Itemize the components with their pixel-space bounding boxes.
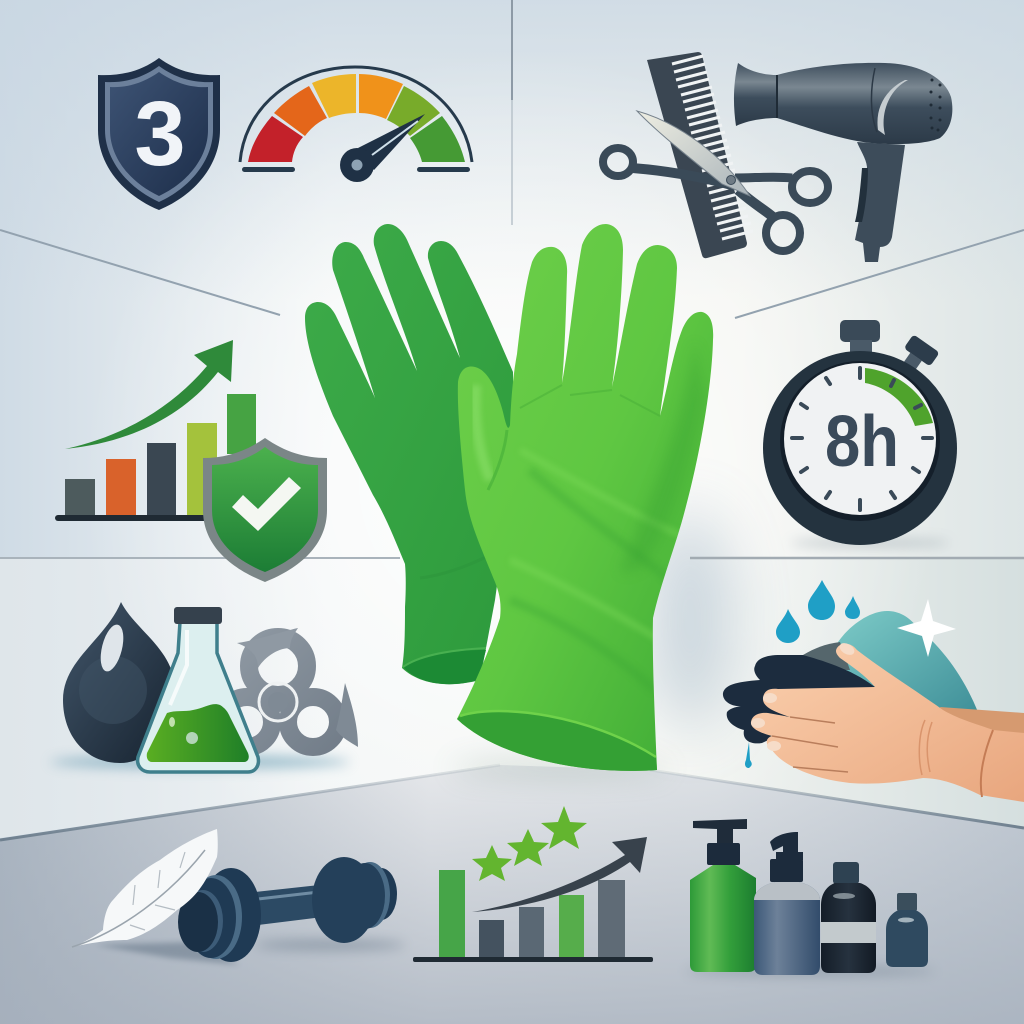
icon: rising bar chart with arrow and green shield [55,340,327,582]
sparkle [897,599,956,657]
icon: bar chart with stars and arrow [413,806,653,962]
green pump bottle [690,819,756,972]
hand [751,644,1024,802]
back arm [940,707,1024,740]
grey pump bottle [754,832,820,975]
icon: lightweight feather and dumbbell [72,829,405,965]
scissors [603,111,828,251]
small bottle [886,893,928,967]
comb [647,52,753,258]
feather [72,829,218,947]
flask [138,607,258,772]
icon: gauge meter [240,67,472,182]
oil drop [63,602,175,763]
front glove [457,224,713,771]
black bottle [821,862,876,973]
dumbbell [178,857,397,962]
biohazard symbol [222,628,358,747]
icon: shield with number 3: 3 [134,83,186,185]
icon: shield with number 3 [98,58,220,210]
dirty black glove [723,642,875,743]
soap dome [838,611,978,715]
icon: cosmetic bottles [685,819,935,976]
icon: comb, scissors and hair dryer [603,52,952,262]
growth arrow [65,340,233,449]
shadow under gloves [450,760,670,776]
bars [55,394,256,521]
icon: hands washing off with soap [723,580,1024,802]
icon: stopwatch 8h [763,320,957,548]
back glove [305,224,513,684]
green shield with check mark [203,438,327,582]
8h label: 8h [825,402,899,482]
water drops [745,580,860,768]
hair dryer [734,63,952,262]
icon: oil drop, chemical flask and biohazard [50,602,358,772]
